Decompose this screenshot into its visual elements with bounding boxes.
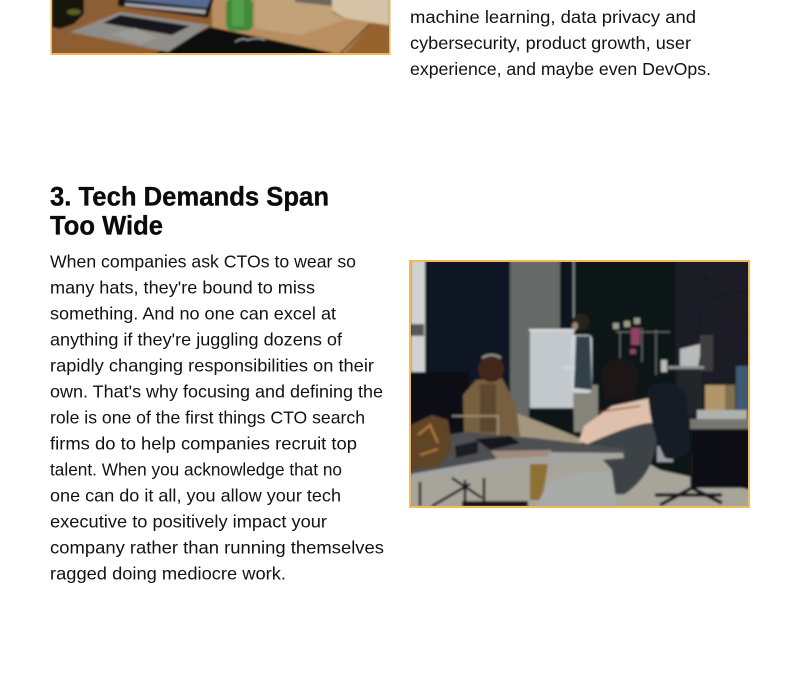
heading: 3. Tech Demands Span Too Wide <box>50 182 329 240</box>
paragraph: section 3 body text: own. That's why focusing and defining the <box>50 382 383 402</box>
paragraph: section 3 body text: one can do it all, you allow your tech <box>50 486 341 506</box>
paragraph: section 3 body text: executive to positively impact your <box>50 512 327 532</box>
paragraph: end of section 2 text: machine learning, data privacy and <box>410 7 696 27</box>
paragraph: section 3 body text: something. And no one can excel at <box>50 304 336 324</box>
paragraph: end of section 2 text <box>410 7 711 79</box>
photo: laptop and green mug on a wooden desk <box>50 0 392 56</box>
paragraph: section 3 body text: ragged doing mediocre work. <box>50 564 286 584</box>
heading: 3. Tech Demands Span Too Wide: Too Wide <box>50 210 163 240</box>
paragraph: end of section 2 text: experience, and maybe even DevOps. <box>410 59 711 79</box>
paragraph: section 3 body text <box>50 252 384 584</box>
paragraph: section 3 body text: When companies ask CTOs to wear so <box>50 252 356 272</box>
paragraph: section 3 body text: company rather than running themselves <box>50 538 384 558</box>
heading: 3. Tech Demands Span Too Wide: 3. Tech Demands Span <box>50 182 329 212</box>
paragraph: section 3 body text: anything if they're juggling dozens of <box>50 330 342 350</box>
photo: team meeting in a dark office with a whiteboard <box>409 260 751 510</box>
paragraph: section 3 body text: firms do to help companies recruit top <box>50 434 357 454</box>
paragraph: section 3 body text: rapidly changing responsibilities on their <box>50 356 374 376</box>
paragraph: section 3 body text: role is one of the first things CTO search <box>50 408 365 428</box>
paragraph: end of section 2 text: cybersecurity, product growth, user <box>410 33 691 53</box>
paragraph: section 3 body text: talent. When you acknowledge that no <box>50 460 342 480</box>
paragraph: section 3 body text: many hats, they're bound to miss <box>50 278 315 298</box>
